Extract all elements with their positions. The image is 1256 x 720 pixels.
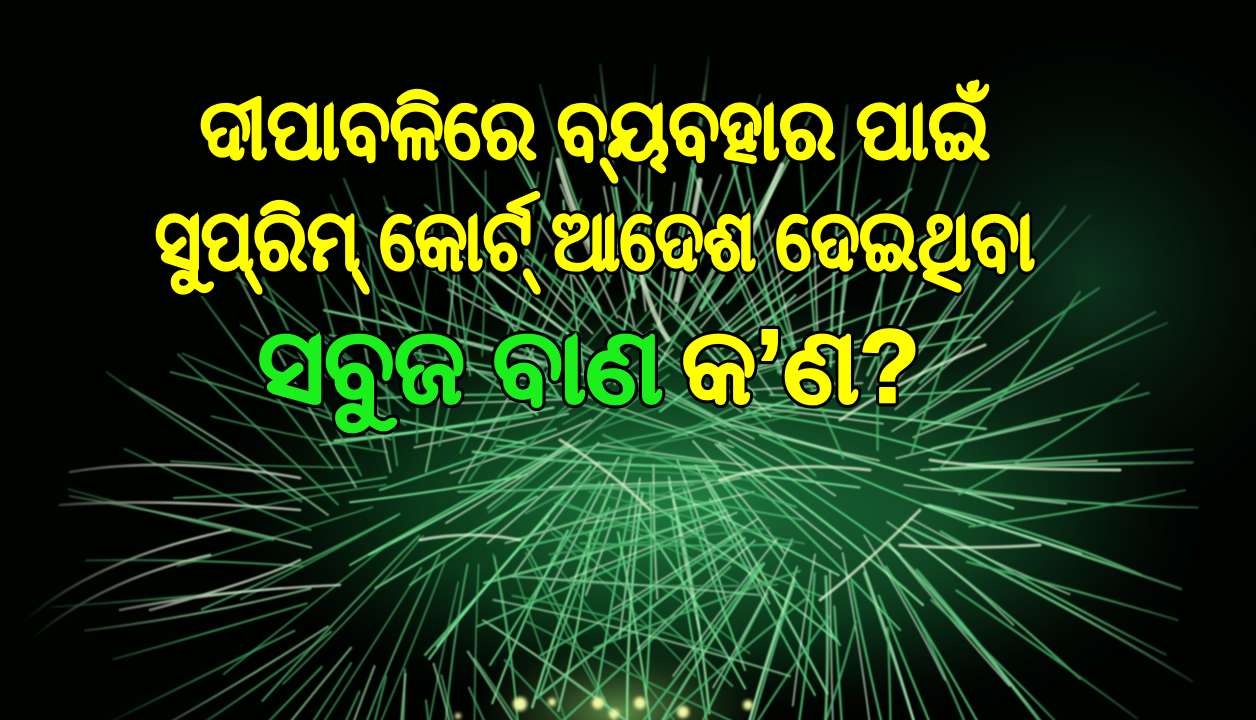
title line 1: ଦୀପାବଳିରେ ବ୍ୟବହାର ପାଇଁ (200, 80, 990, 183)
title line 3: green part: ସବୁଜ ବାଣ (258, 309, 663, 433)
firework burst: lower left (32, 227, 792, 720)
background glow (276, 107, 1256, 720)
title line 3: green part: ସବୁଜ ବାଣ (258, 309, 663, 433)
title line 2: ସୁପ୍ରିମ୍ କୋର୍ଟ୍ ଆଦେଶ ଦେଇଥିବା (155, 191, 1035, 294)
firework burst: centre (318, 56, 1016, 720)
title line 2: ସୁପ୍ରିମ୍ କୋର୍ଟ୍ ଆଦେଶ ଦେଇଥିବା (155, 191, 1035, 294)
firework burst: left (168, 146, 825, 720)
title line 3: yellow question: କ’ଣ? (682, 309, 920, 425)
ground lights (455, 697, 753, 719)
pale bright streaks (420, 160, 1120, 600)
firework burst: right (456, 104, 1200, 720)
title line 1: ଦୀପାବଳିରେ ବ୍ୟବହାର ପାଇଁ (200, 80, 990, 183)
title line 3: yellow question: କ’ଣ? (682, 309, 920, 425)
